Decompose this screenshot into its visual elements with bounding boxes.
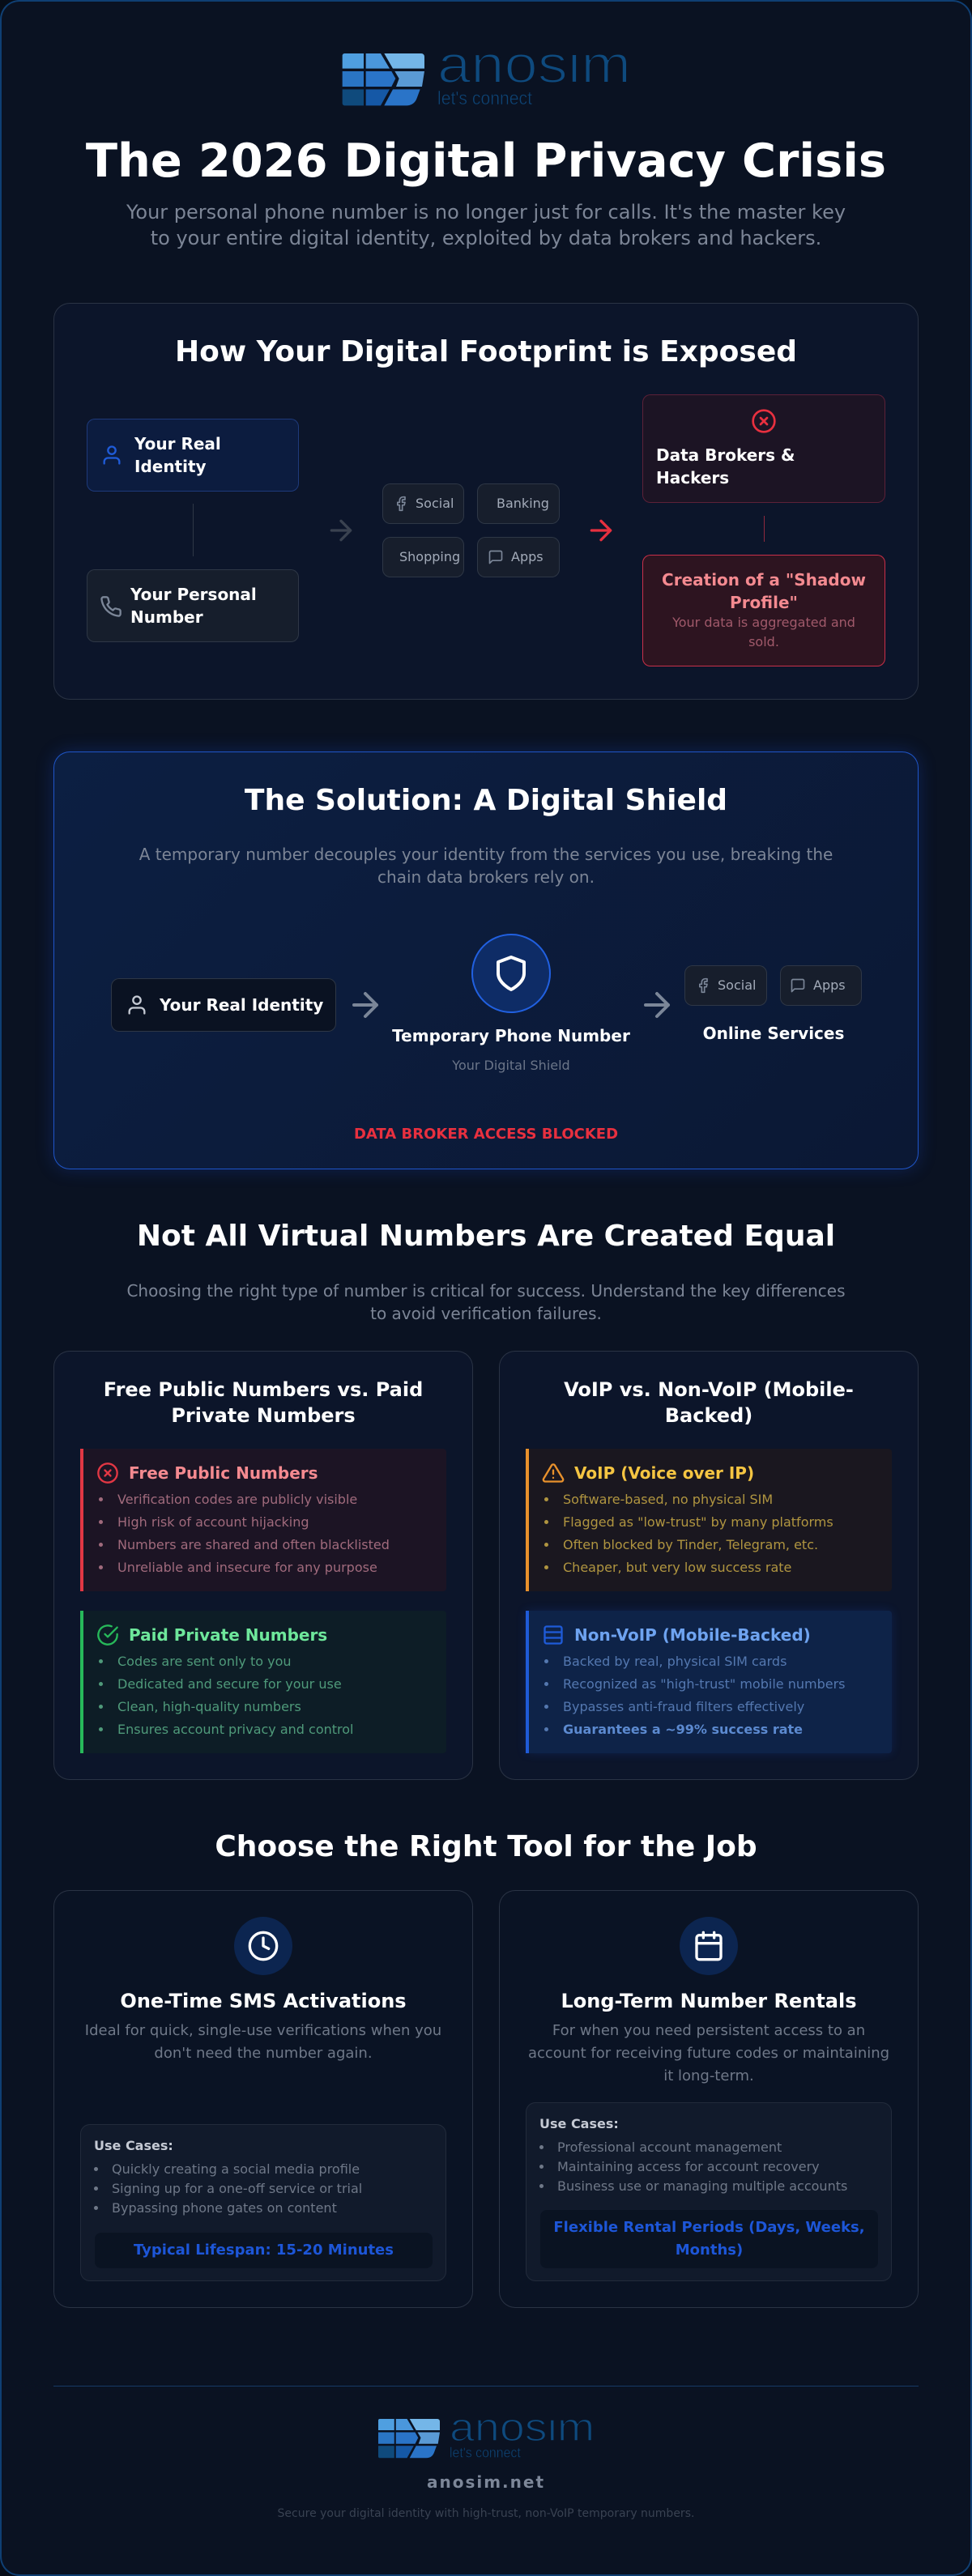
chip: shopping: Shopping [399,549,460,564]
node: your real identity: Identity [134,457,207,476]
card description: Ideal for quick, single-use verifications when you [85,2022,441,2039]
use cases box: Maintaining access for account recovery [557,2159,820,2174]
arrow: to shield [352,991,379,1019]
node: your real identity [111,978,336,1032]
node: shadow profile: Your data is aggregated and [672,615,855,630]
card title: VoIP vs. Non-VoIP (Mobile- [564,1378,854,1401]
node: shadow profile: Creation of a "Shadow [662,570,866,590]
rental badge: Flexible Rental Periods (Days, Weeks, [553,2219,865,2236]
card title: Backed) [665,1404,752,1427]
node: data brokers and hackers: Data Brokers & [656,445,795,465]
node: shadow profile: sold. [748,634,779,649]
icon: shield [471,934,551,1013]
chip: shopping [382,537,464,577]
block: free public numbers: Numbers are shared and often blacklisted [117,1537,390,1552]
heading: not all virtual numbers: Not All Virtual Numbers Are Created Equal [137,1220,835,1253]
heading: footprint: How Your Digital Footprint is Exposed [175,335,797,368]
chip: apps: Apps [813,977,846,993]
rental badge: Months) [676,2242,743,2259]
panel: one-time sms [53,1890,473,2308]
block: paid private numbers: Ensures account privacy and control [117,1722,353,1737]
block: paid private numbers: Codes are sent only to you [117,1654,292,1669]
use cases box [526,2102,892,2281]
block: voip: VoIP (Voice over IP) [574,1463,754,1483]
block: non-voip: Recognized as "high-trust" mobile numbers [563,1676,845,1692]
block: paid private numbers: Dedicated and secure for your use [117,1676,342,1692]
block: free public numbers: Unreliable and insecure for any purpose [117,1560,377,1575]
block: paid private numbers: Paid Private Numbers [129,1625,327,1645]
subtitle [126,201,846,249]
block: non-voip: Non-VoIP (Mobile-Backed) [574,1625,811,1645]
block: paid private numbers: Clean, high-quality numbers [117,1699,301,1714]
card description: don't need the number again. [154,2045,373,2062]
chip: apps [477,537,560,577]
solution description: A temporary number decouples your identity from the services you use, breaking the [139,845,833,864]
card title: Long-Term Number Rentals [561,1990,857,2012]
use cases box: Professional account management [557,2140,782,2155]
node: shadow profile [642,555,885,666]
label: online services: Online Services [703,1024,844,1043]
title: The 2026 Digital Privacy Crisis [86,134,886,188]
logo: anosim footer: let's connect [450,2444,521,2460]
card title [104,1378,423,1427]
node: shadow profile: Profile" [730,593,798,612]
panel: free vs paid [53,1351,473,1780]
chip: social [684,965,767,1006]
label: temporary phone number: Temporary Phone Number [392,1026,630,1045]
card description [85,2022,441,2062]
block: non-voip: Backed by real, physical SIM cards [563,1654,787,1669]
panel: voip vs non-voip [499,1351,919,1780]
node: your real identity: Your Real [134,434,221,453]
node: data brokers and hackers [642,394,885,503]
subtitle: to your entire digital identity, exploited by data brokers and hackers. [151,227,821,249]
node: your personal number: Your Personal [130,585,257,604]
card description: it long-term. [663,2067,754,2084]
icon: calendar [680,1917,738,1975]
logo: anosim header [342,53,626,109]
logo: anosim footer [378,2419,591,2460]
heading: solution: The Solution: A Digital Shield [245,784,727,817]
node: data brokers and hackers: Hackers [656,468,729,488]
use cases box: Signing up for a one-off service or trial [112,2181,362,2196]
icon: clock [234,1917,292,1975]
rental badge [540,2210,878,2268]
chip: banking: Banking [497,496,549,511]
chip: apps: Apps [511,549,544,564]
use cases box: Quickly creating a social media profile [112,2161,360,2177]
lifespan badge: Typical Lifespan: 15-20 Minutes [134,2242,394,2259]
block: free public numbers: Verification codes are publicly visible [117,1492,357,1507]
chip: social: Social [718,977,756,993]
label: your digital shield: Your Digital Shield [452,1058,570,1073]
chip: apps [780,965,862,1006]
block: free public numbers: Free Public Numbers [129,1463,318,1483]
solution description [139,845,833,887]
logo: anosim header: let's connect [437,87,533,109]
block: non-voip: Guarantees a ~99% success rate [563,1722,803,1737]
block: voip: Cheaper, but very low success rate [563,1560,791,1575]
use cases box [80,2124,446,2281]
block: voip: Often blocked by Tinder, Telegram, etc. [563,1537,818,1552]
node: your personal number [87,569,299,642]
block: non-voip [526,1611,892,1753]
card title [564,1378,854,1427]
arrow: to services [330,520,352,541]
use cases box: Use Cases: [94,2138,173,2153]
block: free public numbers [80,1449,446,1591]
heading: choose the right tool: Choose the Right Tool for the Job [215,1830,757,1863]
block: voip: Flagged as "low-trust" by many platforms [563,1514,833,1530]
card description: For when you need persistent access to an [552,2022,865,2039]
section description: to avoid verification failures. [370,1304,602,1323]
use cases box: Use Cases: [539,2116,619,2131]
node: your personal number: Number [130,607,203,627]
use cases box: Business use or managing multiple accounts [557,2178,847,2194]
block: voip [526,1449,892,1591]
footer site name: anosim.net [427,2472,545,2492]
chip: social: Social [416,496,454,511]
node: your real identity [87,419,299,492]
card description [528,2022,889,2084]
chip: banking [477,483,560,524]
card title: Private Numbers [171,1404,356,1427]
card title: One-Time SMS Activations [120,1990,407,2012]
block: paid private numbers [80,1611,446,1753]
block: free public numbers: High risk of account hijacking [117,1514,309,1530]
section description [126,1281,846,1323]
card description: account for receiving future codes or maintaining [528,2045,889,2062]
panel: how your digital footprint is exposed [53,303,919,700]
block: voip: Software-based, no physical SIM [563,1492,773,1507]
node: your real identity: Your Real Identity [160,995,323,1015]
arrow: to brokers [590,520,612,541]
card title: Free Public Numbers vs. Paid [104,1378,423,1401]
solution description: chain data brokers rely on. [377,867,595,887]
callout: blocked: DATA BROKER ACCESS BLOCKED [354,1126,618,1143]
footer tagline: Secure your digital identity with high-trust, non-VoIP temporary numbers. [278,2507,694,2520]
use cases box: Bypassing phone gates on content [112,2200,337,2216]
block: non-voip: Bypasses anti-fraud filters effectively [563,1699,804,1714]
chip: social [382,483,464,524]
lifespan badge [95,2233,433,2268]
panel: the solution [53,752,919,1169]
arrow: to services [644,991,671,1019]
section description: Choosing the right type of number is critical for success. Understand the key differences [126,1281,846,1301]
subtitle: Your personal phone number is no longer just for calls. It's the master key [126,201,846,224]
panel: long-term rentals [499,1890,919,2308]
